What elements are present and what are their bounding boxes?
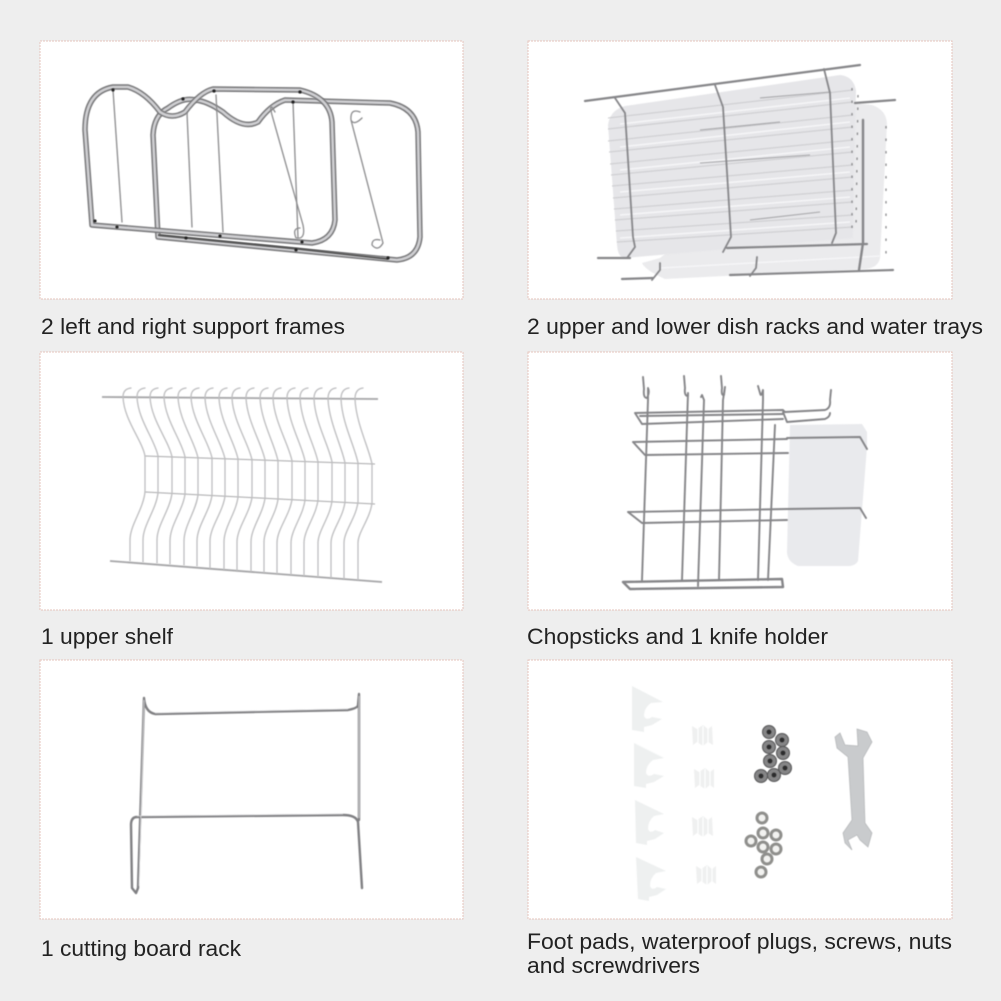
illustration: front support frame [85, 87, 335, 243]
illustration: foot pads [632, 686, 666, 901]
panel: dish racks and water trays [528, 41, 952, 299]
illustration: cutting board rack wire [131, 694, 362, 893]
illustration: chopstick container [787, 424, 867, 566]
illustration: shelf wires [123, 388, 372, 580]
illustration: holder wire frame [623, 376, 867, 589]
caption: upper shelf: 1 upper shelf [41, 624, 174, 649]
panel: chopsticks and knife holder [528, 352, 952, 610]
illustration: shelf rods [102, 397, 382, 582]
illustration: waterproof plugs [692, 725, 716, 885]
illustration: shelf cross wires [145, 456, 375, 504]
panel: support frames [40, 41, 463, 299]
caption: chopsticks and knife holder: Chopsticks and 1 knife holder [527, 624, 828, 649]
caption: support frames: 2 left and right support frames [41, 314, 345, 339]
illustration: wrench [835, 729, 872, 850]
caption: accessories second line: and screwdrivers [527, 953, 700, 978]
illustration: tray ribs [608, 88, 886, 268]
panel: cutting board rack [40, 660, 463, 919]
caption: dish racks and water trays: 2 upper and lower dish racks and water trays [527, 314, 983, 339]
panel: accessories [528, 660, 952, 919]
caption: accessories: Foot pads, waterproof plugs, screws, nuts [527, 929, 952, 954]
caption: cutting board rack: 1 cutting board rack [41, 936, 242, 961]
illustration: rear support frame [153, 99, 420, 260]
illustration: front water tray [608, 75, 856, 258]
illustration: screws [754, 726, 792, 782]
illustration: nuts [746, 813, 781, 877]
illustration: rack rods [585, 65, 895, 280]
panel: upper shelf [40, 352, 463, 610]
illustration: frame wires and scrolls [93, 88, 390, 260]
illustration: rear water tray [642, 103, 887, 279]
